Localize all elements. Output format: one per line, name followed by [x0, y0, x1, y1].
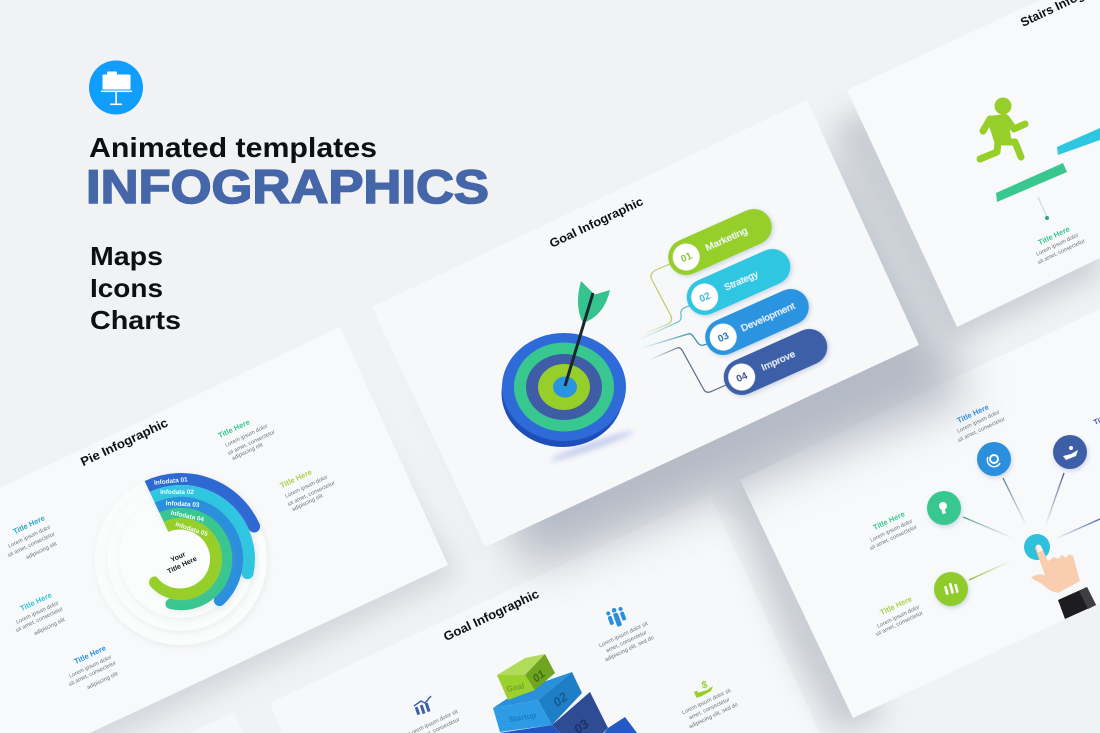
- panel: stairs infographic slide: [847, 0, 1100, 327]
- text block: pie left three: adipiscing elit: [86, 671, 119, 691]
- text block: pie left two: adipiscing elit: [33, 617, 66, 637]
- text block: pie left one: Title Here: [12, 513, 46, 536]
- pill: 03 development: 03: [716, 330, 731, 345]
- icon node: lime: [934, 572, 968, 606]
- text block: lime title: sit amet, consectetur: [875, 610, 924, 638]
- text block: pie right: sit amet, consectetur: [287, 480, 336, 508]
- pill: 04 improve: [718, 323, 833, 401]
- text block: pie right: Lorem ipsum dolor: [284, 474, 329, 500]
- pill: 04 improve: Improve: [760, 349, 797, 374]
- chart: stacked cubes: 02: [550, 689, 571, 710]
- text block: pie left one: Lorem ipsum dolor: [7, 524, 52, 550]
- text block: blue title: Title Here: [956, 402, 990, 425]
- labels: pie rings: Infodata 03: [166, 500, 200, 509]
- icon: running figure: [980, 98, 1025, 159]
- heading: goal infographic: Goal Infographic: [547, 194, 646, 251]
- heading: goal infographic stacked: Goal Infographic: [441, 587, 541, 644]
- text block: lime title: Title Here: [879, 594, 913, 617]
- text block: pie right: Title Here: [279, 467, 313, 490]
- text block: pie top: adipiscing elit: [231, 442, 264, 462]
- text block: pie left one: adipiscing elit: [25, 541, 58, 561]
- pill: 02 strategy: Strategy: [723, 269, 760, 294]
- shadow: pie slide: [0, 375, 460, 733]
- shadow: band left of hand slide: [725, 470, 885, 733]
- text: dollar description: adipiscing elit, sed do: [688, 702, 739, 730]
- labels: pie rings: Infodata 02: [160, 489, 194, 496]
- pill: 02 strategy: [681, 243, 796, 321]
- text block: pie right: adipiscing elit: [291, 493, 324, 513]
- icon: dollar hand: $: [701, 680, 709, 691]
- text: people description: [598, 621, 655, 663]
- stair: green: [996, 163, 1067, 202]
- icon: pointing hand: [1031, 544, 1080, 593]
- chart: stacked cubes: Startup: [508, 711, 537, 724]
- icon: arrow: [565, 281, 610, 386]
- text block: green title: sit amet, consectetur: [869, 524, 918, 552]
- text block: blue title: [956, 402, 1006, 444]
- text: people description: Lorem ipsum dolor sit: [598, 621, 649, 649]
- text block: pie left two: [15, 590, 66, 637]
- labels: pie rings: Infodata 04: [170, 510, 205, 524]
- pill: 02 strategy: 02: [698, 290, 713, 305]
- icon: dollar hand: [694, 680, 713, 698]
- text block: pie top: [217, 417, 276, 462]
- list: maps icons charts: [90, 241, 181, 335]
- chart: target: [502, 333, 626, 447]
- text block: pie left two: Title Here: [19, 590, 53, 613]
- text: people description: adipiscing elit, sed do: [604, 635, 655, 663]
- text block: pie top: sit amet, consectetur: [227, 429, 276, 457]
- title: infographics: INFOGRAPHICS: [86, 160, 489, 213]
- text block: stairs title: sit amet, consectetur: [1037, 238, 1086, 266]
- text: dollar description: amet, consectetur: [688, 697, 731, 721]
- text block: pie top: Title Here: [217, 417, 251, 440]
- panel: stacked goal infographic slide: [270, 495, 820, 733]
- icon: suit sleeve: [1058, 587, 1096, 619]
- pill: 04 improve: 04: [735, 370, 750, 385]
- heading: animated templates: Animated templates: [89, 132, 377, 163]
- chart: stacked cubes: [493, 654, 637, 733]
- text block: pie left three: Title Here: [73, 643, 107, 666]
- text block: pie left three: Lorem ipsum dolor: [68, 654, 113, 680]
- text block: pie left two: Lorem ipsum dolor: [15, 600, 60, 626]
- pill: 03 development: Development: [739, 301, 797, 334]
- text block: pie left three: [68, 643, 119, 691]
- text: pie centre: Title Here: [167, 556, 198, 576]
- list: maps icons charts: Charts: [90, 305, 181, 335]
- text block: blue title: sit amet, consectetur: [957, 416, 1006, 444]
- shadow: stairs slide: [830, 15, 1100, 345]
- panel: pie infographic slide: [0, 327, 448, 733]
- text block: green title: [869, 509, 918, 552]
- chart: pie rings: [95, 473, 267, 645]
- icon: people: [605, 605, 628, 629]
- text block: pie left two: sit amet, consectetur: [15, 606, 64, 634]
- text block: pie right: [279, 467, 336, 513]
- list: maps icons charts: Icons: [90, 273, 163, 303]
- text block: pie left one: sit amet, consectetur: [7, 531, 56, 559]
- text block: pie top: Lorem ipsum dolor: [224, 423, 269, 449]
- pill: 03 development: [699, 283, 815, 361]
- chart: stacked cubes: Goal: [506, 681, 525, 694]
- shadow: central slide: [445, 155, 970, 570]
- icon node: blue: [977, 442, 1011, 476]
- text: dollar description: [681, 688, 739, 730]
- labels: pie rings: [154, 476, 209, 538]
- text: people description: amet, consectetur: [605, 630, 648, 654]
- panel: central goal infographic slide: [372, 100, 919, 547]
- chart: stacked cubes: 01: [531, 668, 548, 685]
- shadow: target: [549, 428, 635, 464]
- text block: pie left one: [7, 513, 58, 561]
- icon node: navy: [1053, 435, 1087, 469]
- text block: stairs title: Title Here: [1037, 224, 1071, 247]
- panel: hand pointer slide: [740, 309, 1100, 718]
- text block: stairs title: [1035, 224, 1086, 266]
- pill: 01 marketing: 01: [679, 250, 694, 265]
- text block: green title: Lorem ipsum dolor: [869, 518, 914, 544]
- icon: touch point: [1024, 534, 1050, 560]
- text block: stairs title: Lorem ipsum dolor: [1035, 232, 1080, 258]
- list: maps icons charts: Maps: [90, 241, 163, 271]
- text block: blue title: Lorem ipsum dolor: [956, 409, 1001, 435]
- pill: 01 marketing: Marketing: [704, 225, 749, 254]
- text block: pie left three: sit amet, consectetur: [68, 660, 117, 688]
- stair: cyan: [1057, 128, 1100, 155]
- icon: growth chart: [414, 696, 431, 715]
- connector lines: [637, 263, 726, 392]
- heading: pie infographic: Pie Infographic: [78, 416, 170, 469]
- panel: small slide at lower left: [190, 712, 244, 733]
- text: dollar description: Lorem ipsum dolor sit: [681, 688, 732, 716]
- icon node: green: [927, 491, 961, 525]
- text block: green title: Title Here: [872, 509, 906, 532]
- text: pie centre: Your: [170, 551, 187, 564]
- pin line: [1038, 197, 1049, 220]
- pill: 01 marketing: [662, 203, 778, 281]
- connector lines: [963, 473, 1100, 580]
- labels: pie rings: Infodata 05: [174, 521, 209, 538]
- labels: pie rings: Infodata 01: [154, 476, 188, 487]
- text block: lime title: Lorem ipsum dolor: [876, 604, 921, 630]
- icon: keynote badge: [89, 60, 143, 114]
- text block: lime title: [875, 594, 924, 638]
